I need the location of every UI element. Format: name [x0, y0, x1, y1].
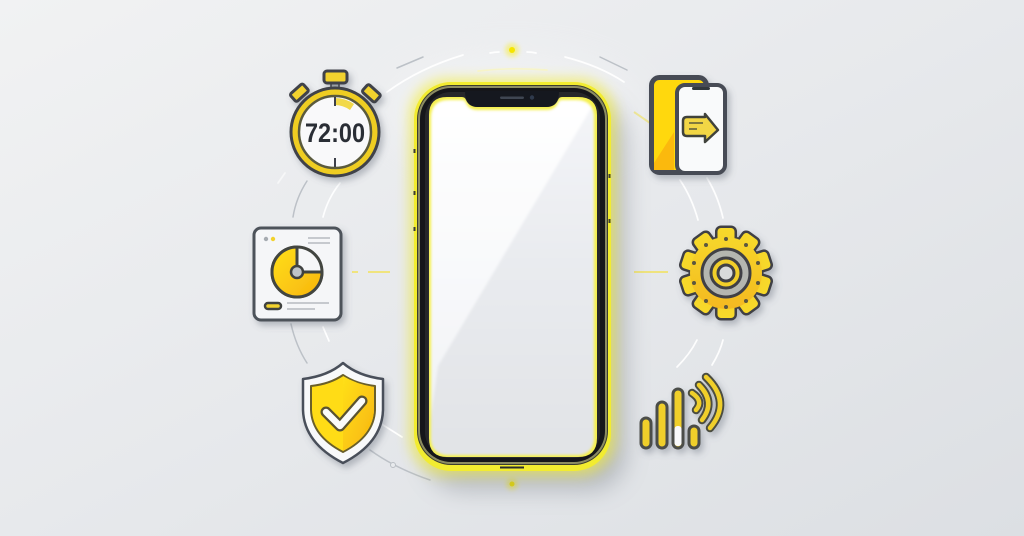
phone shadow and glow — [409, 78, 626, 490]
glow dot: top — [505, 43, 519, 57]
pie chart — [272, 247, 322, 297]
icon: two phones with transfer arrow — [652, 78, 725, 173]
orbit arcs — [278, 52, 723, 480]
transfer arrow — [683, 114, 718, 142]
connector dashes — [352, 112, 668, 272]
screen — [425, 97, 600, 460]
home bar — [500, 466, 524, 468]
icon: signal bars and waves — [641, 377, 720, 448]
glow dot: bottom — [506, 478, 518, 490]
notch — [465, 91, 559, 107]
icon: shield with check — [303, 363, 383, 463]
icon: stopwatch 72:00: 72:00 — [305, 118, 365, 148]
icon: dashboard card with pie — [254, 228, 341, 320]
phone frame — [414, 82, 611, 471]
phone — [409, 78, 626, 490]
soft top halo — [387, 60, 637, 160]
side buttons — [414, 149, 610, 231]
icon: gear — [681, 228, 771, 318]
icon: stopwatch 72:00 — [290, 71, 381, 176]
